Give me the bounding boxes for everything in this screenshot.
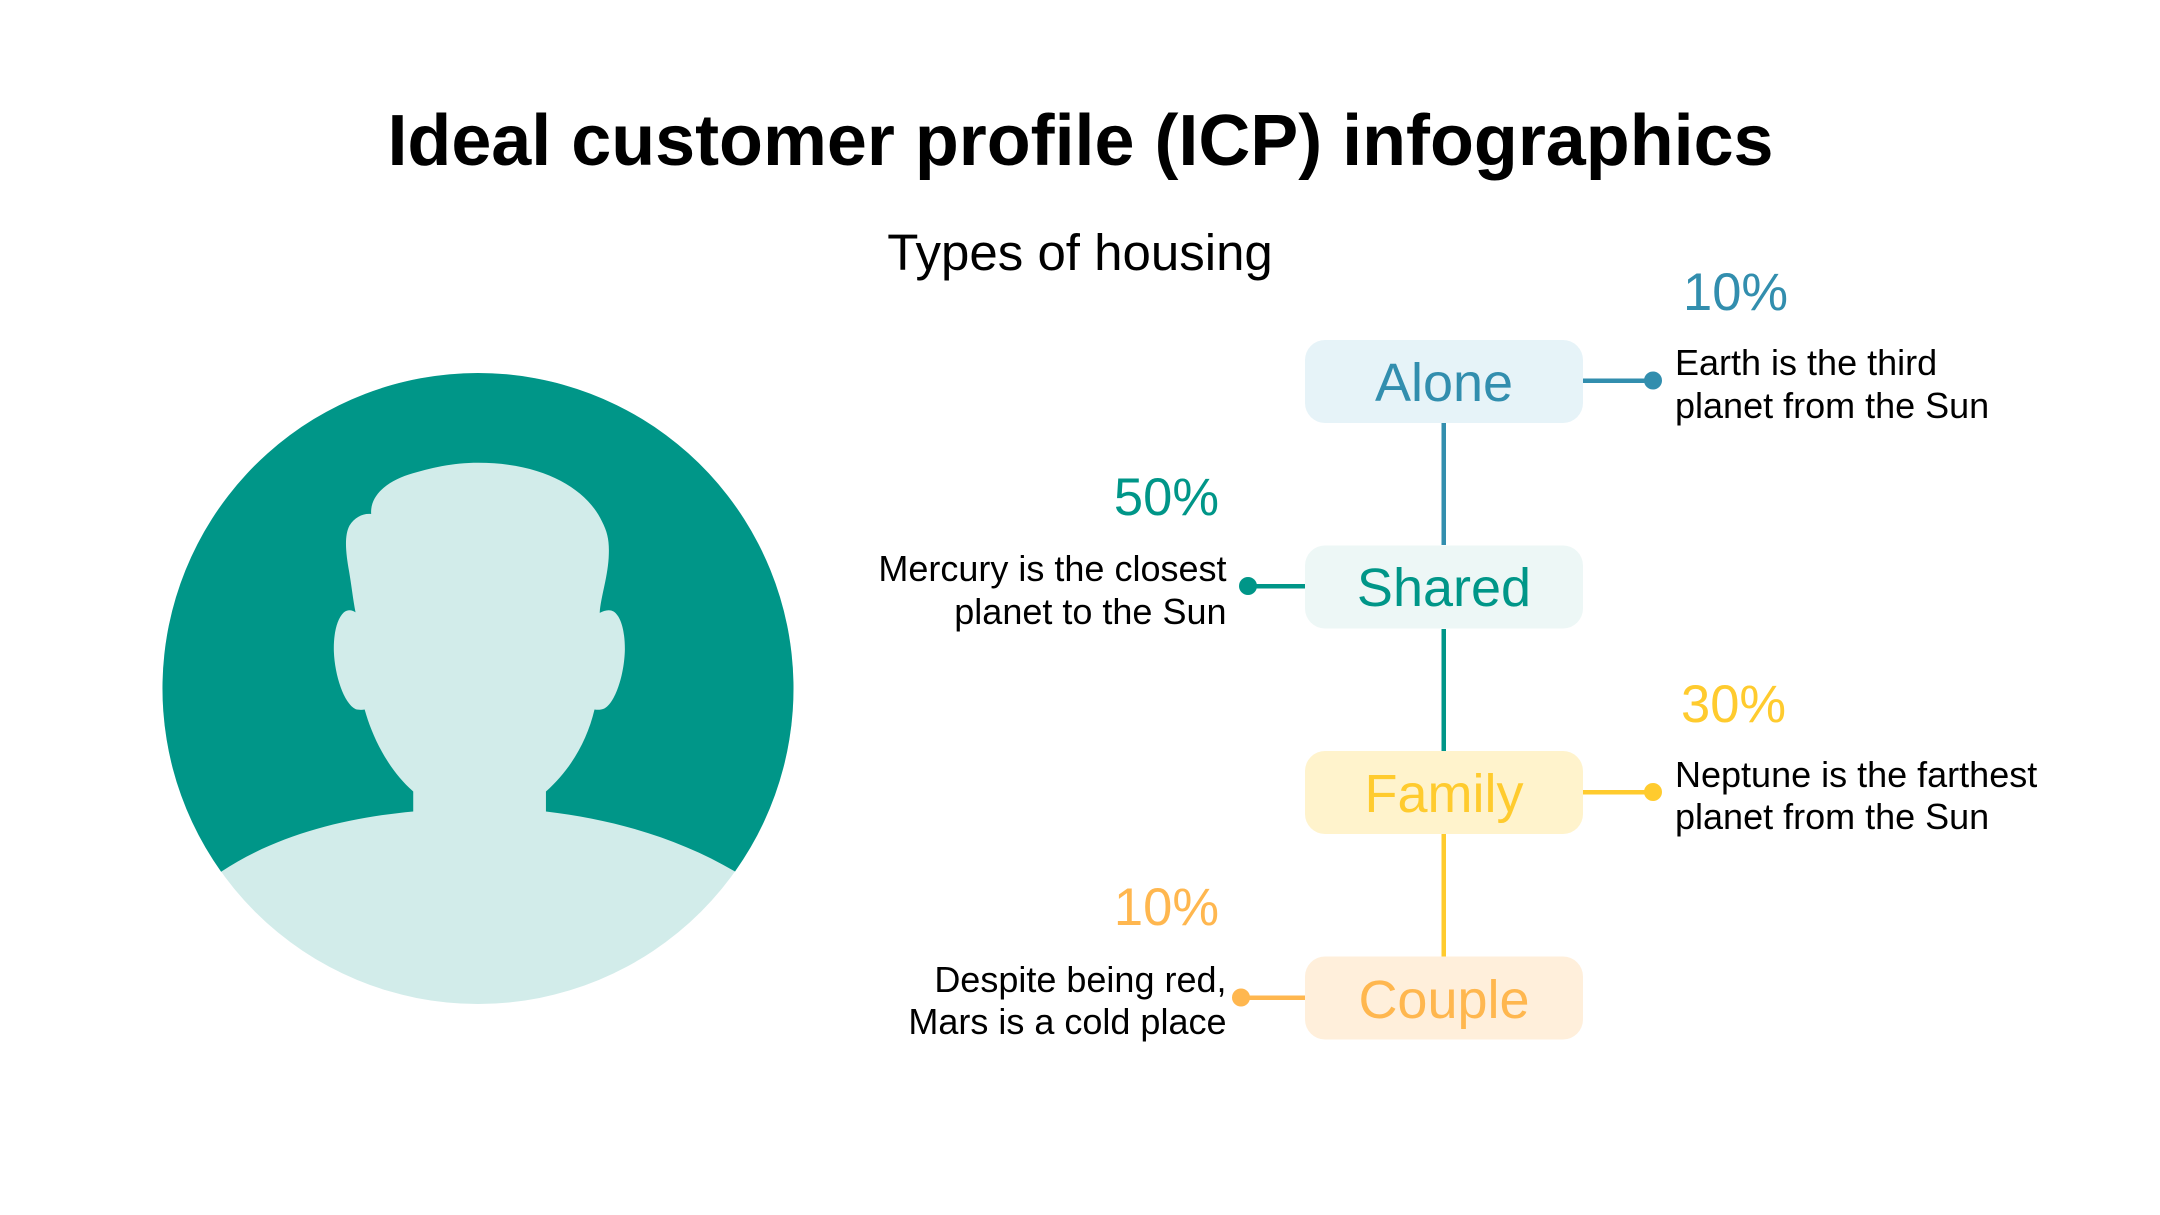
label: couple: Couple <box>1358 970 1530 1030</box>
title: Ideal customer profile (ICP) infographics <box>387 101 1774 181</box>
percentage: shared: 50% <box>1114 468 1219 527</box>
percentage: alone: 10% <box>1683 263 1788 322</box>
box: alone <box>1305 340 1583 423</box>
box: couple <box>1305 956 1583 1040</box>
percentage: family: 30% <box>1681 675 1786 734</box>
connector: shared to family <box>1442 629 1446 751</box>
connector dot: alone <box>1583 372 1662 390</box>
subtitle: types of housing: Types of housing <box>887 224 1273 281</box>
item: family <box>1305 675 2037 837</box>
connector dot: shared <box>1239 577 1305 595</box>
connector: family to couple <box>1442 834 1446 957</box>
connector dot: family <box>1583 783 1662 801</box>
description: alone: Earth is the third <box>1675 342 1937 383</box>
description: alone: planet from the Sun <box>1675 385 1989 426</box>
percentage: couple: 10% <box>1114 878 1219 937</box>
description: shared: planet to the Sun <box>954 591 1226 632</box>
label: alone: Alone <box>1375 353 1513 413</box>
item: couple <box>908 878 1583 1042</box>
connector: alone to shared <box>1442 422 1446 545</box>
item: shared <box>878 468 1583 632</box>
description: family: Neptune is the farthest <box>1675 754 2037 795</box>
icon: customer avatar <box>162 373 794 1004</box>
label: shared: Shared <box>1357 558 1531 618</box>
label: family: Family <box>1364 764 1524 824</box>
description: family: planet from the Sun <box>1675 796 1989 837</box>
description: shared: Mercury is the closest <box>878 548 1226 589</box>
connector dot: couple <box>1232 988 1305 1006</box>
box: family <box>1305 751 1583 834</box>
box: shared <box>1305 546 1583 628</box>
description: couple: Mars is a cold place <box>908 1001 1226 1042</box>
description: couple: Despite being red, <box>934 959 1226 1000</box>
item: alone <box>1305 263 1989 426</box>
